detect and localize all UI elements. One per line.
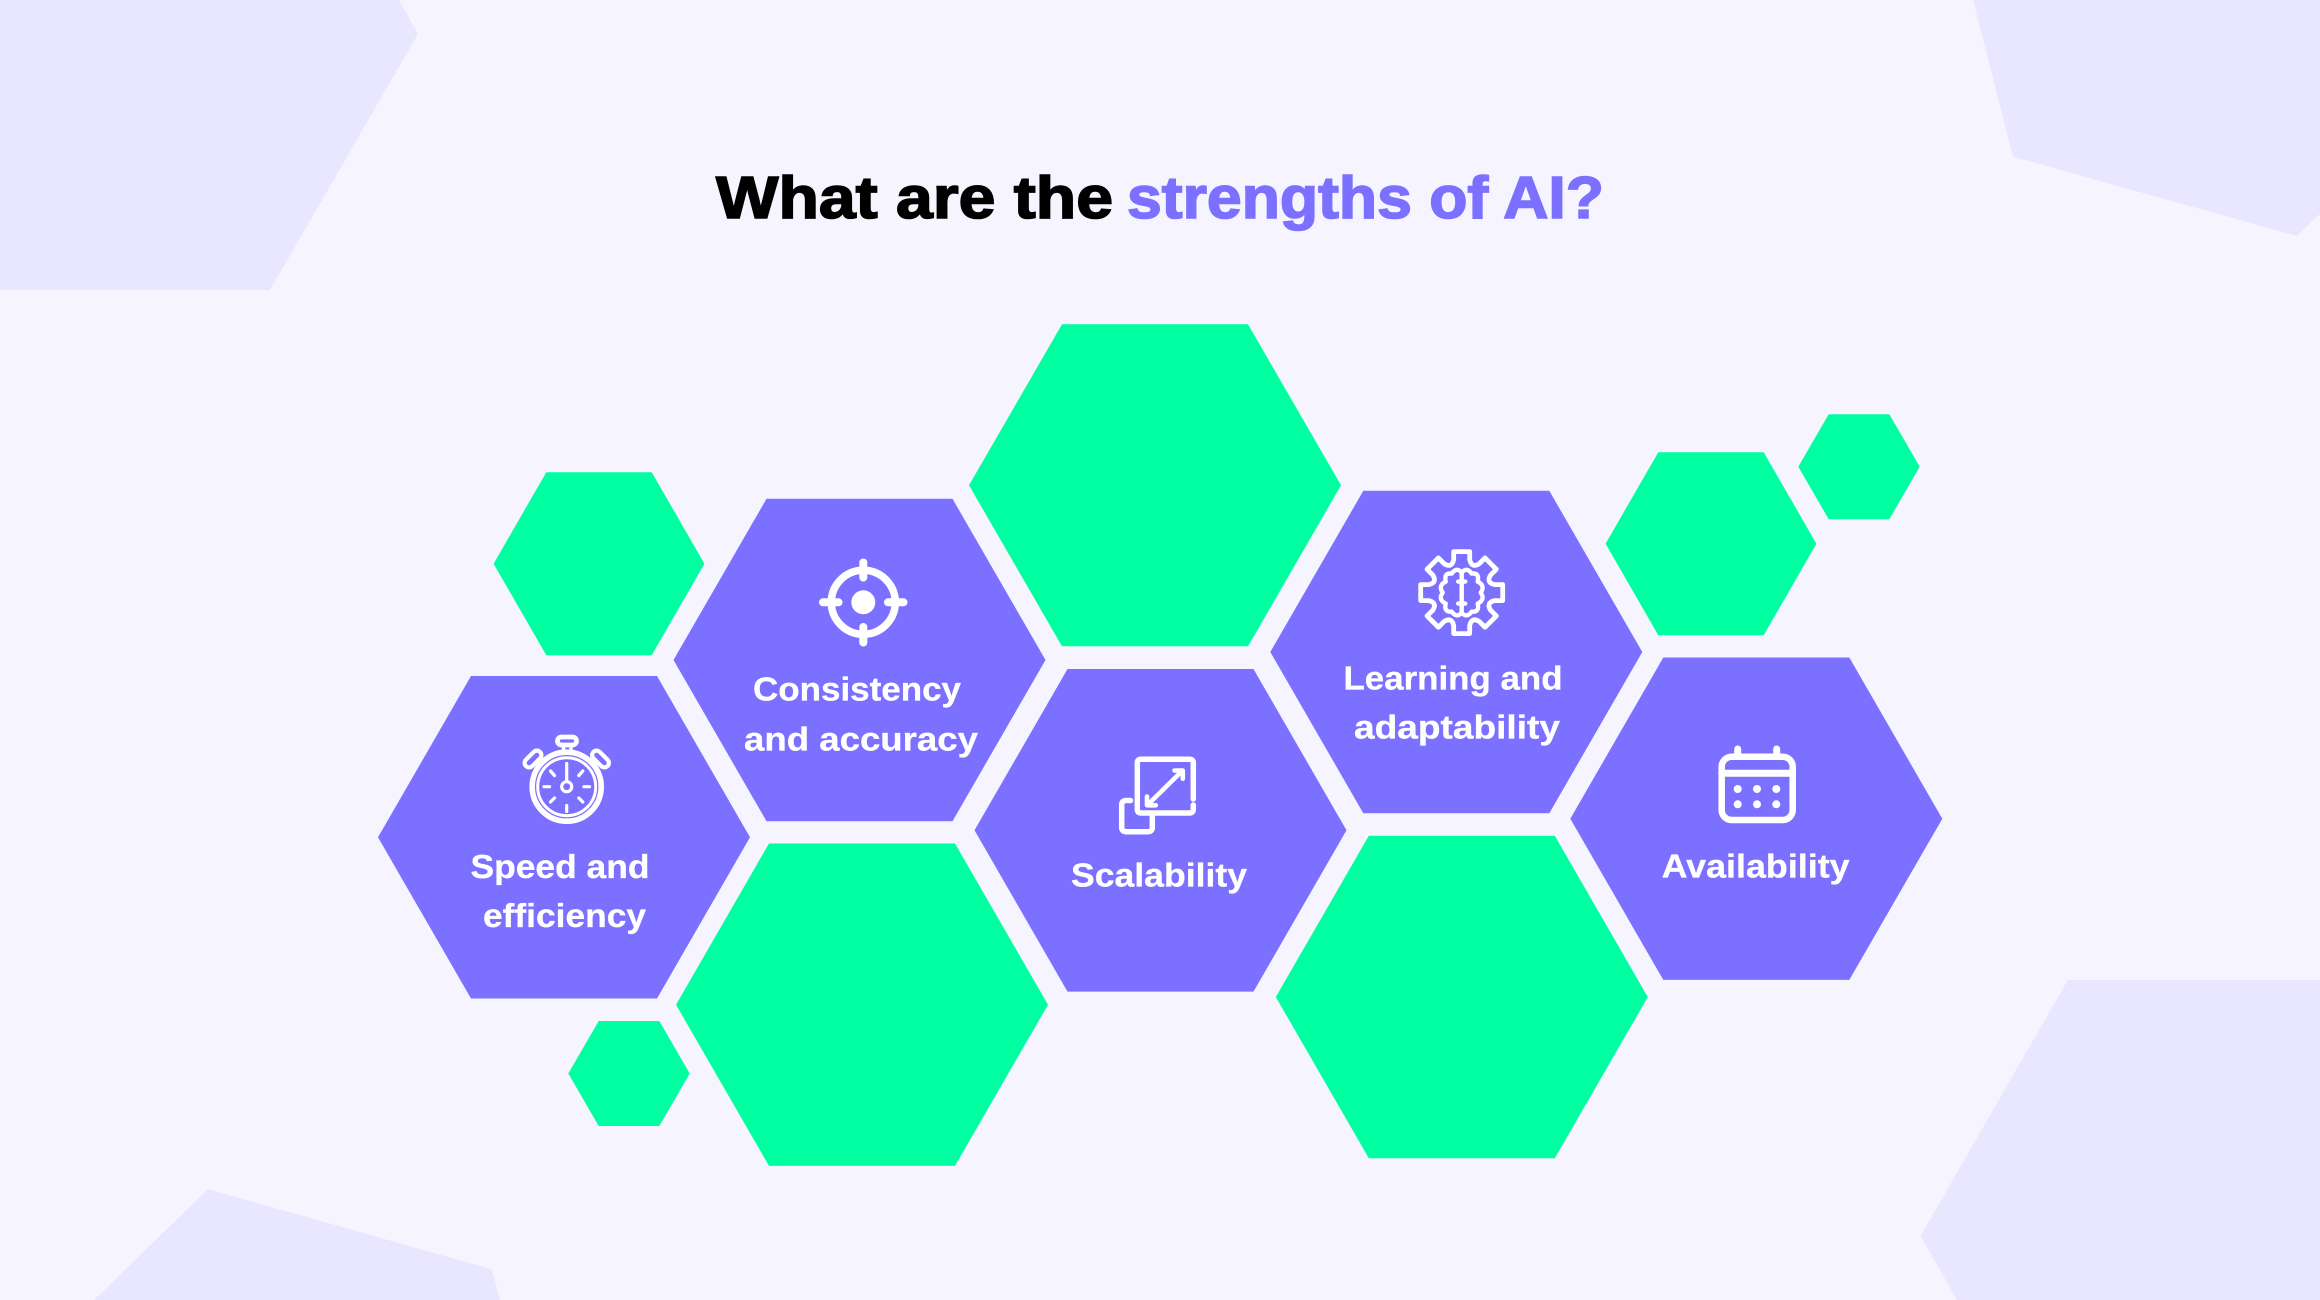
label: learning and adaptability: adaptability xyxy=(1354,709,1561,746)
green hexagon: top centre xyxy=(969,324,1341,646)
background hexagon: bottom right xyxy=(1920,980,2320,1300)
background hexagon: top left xyxy=(0,0,418,290)
green hexagon: below consistency xyxy=(676,844,1048,1166)
label: consistency and accuracy: Consistency xyxy=(753,671,962,708)
green hexagon: medium right xyxy=(1606,452,1816,635)
icon: gear with brain xyxy=(1421,552,1503,634)
label: consistency and accuracy xyxy=(744,671,979,758)
label: learning and adaptability: Learning and xyxy=(1344,659,1562,696)
label: speed and efficiency: efficiency xyxy=(483,897,647,934)
green hexagon: small bottom left xyxy=(568,1021,690,1126)
background hexagon: bottom left xyxy=(94,1189,500,1300)
icon: stopwatch xyxy=(523,737,611,821)
panel: availability xyxy=(1570,658,1942,980)
title xyxy=(716,165,1604,231)
panel: speed and efficiency xyxy=(378,676,750,998)
icon: target xyxy=(823,562,904,642)
label: consistency and accuracy: and accuracy xyxy=(744,721,979,758)
panel: consistency and accuracy xyxy=(674,499,1046,821)
label: scalability: Scalability xyxy=(1071,857,1248,894)
green hexagon: medium left xyxy=(494,472,704,655)
icon: calendar xyxy=(1722,749,1793,820)
label: availability: Availability xyxy=(1662,848,1850,885)
label: speed and efficiency xyxy=(470,848,650,934)
green hexagon: below learning xyxy=(1276,836,1648,1158)
icon: resize squares xyxy=(1122,759,1193,832)
label: speed and efficiency: Speed and xyxy=(470,848,650,885)
background hexagon: top right xyxy=(1973,0,2320,236)
title: strengths of AI? xyxy=(1127,165,1604,231)
panel: learning and adaptability xyxy=(1270,491,1642,813)
green hexagon: small top right xyxy=(1798,414,1920,519)
panel: scalability xyxy=(974,669,1346,992)
title: What are the xyxy=(716,165,1113,231)
label: learning and adaptability xyxy=(1344,659,1562,746)
